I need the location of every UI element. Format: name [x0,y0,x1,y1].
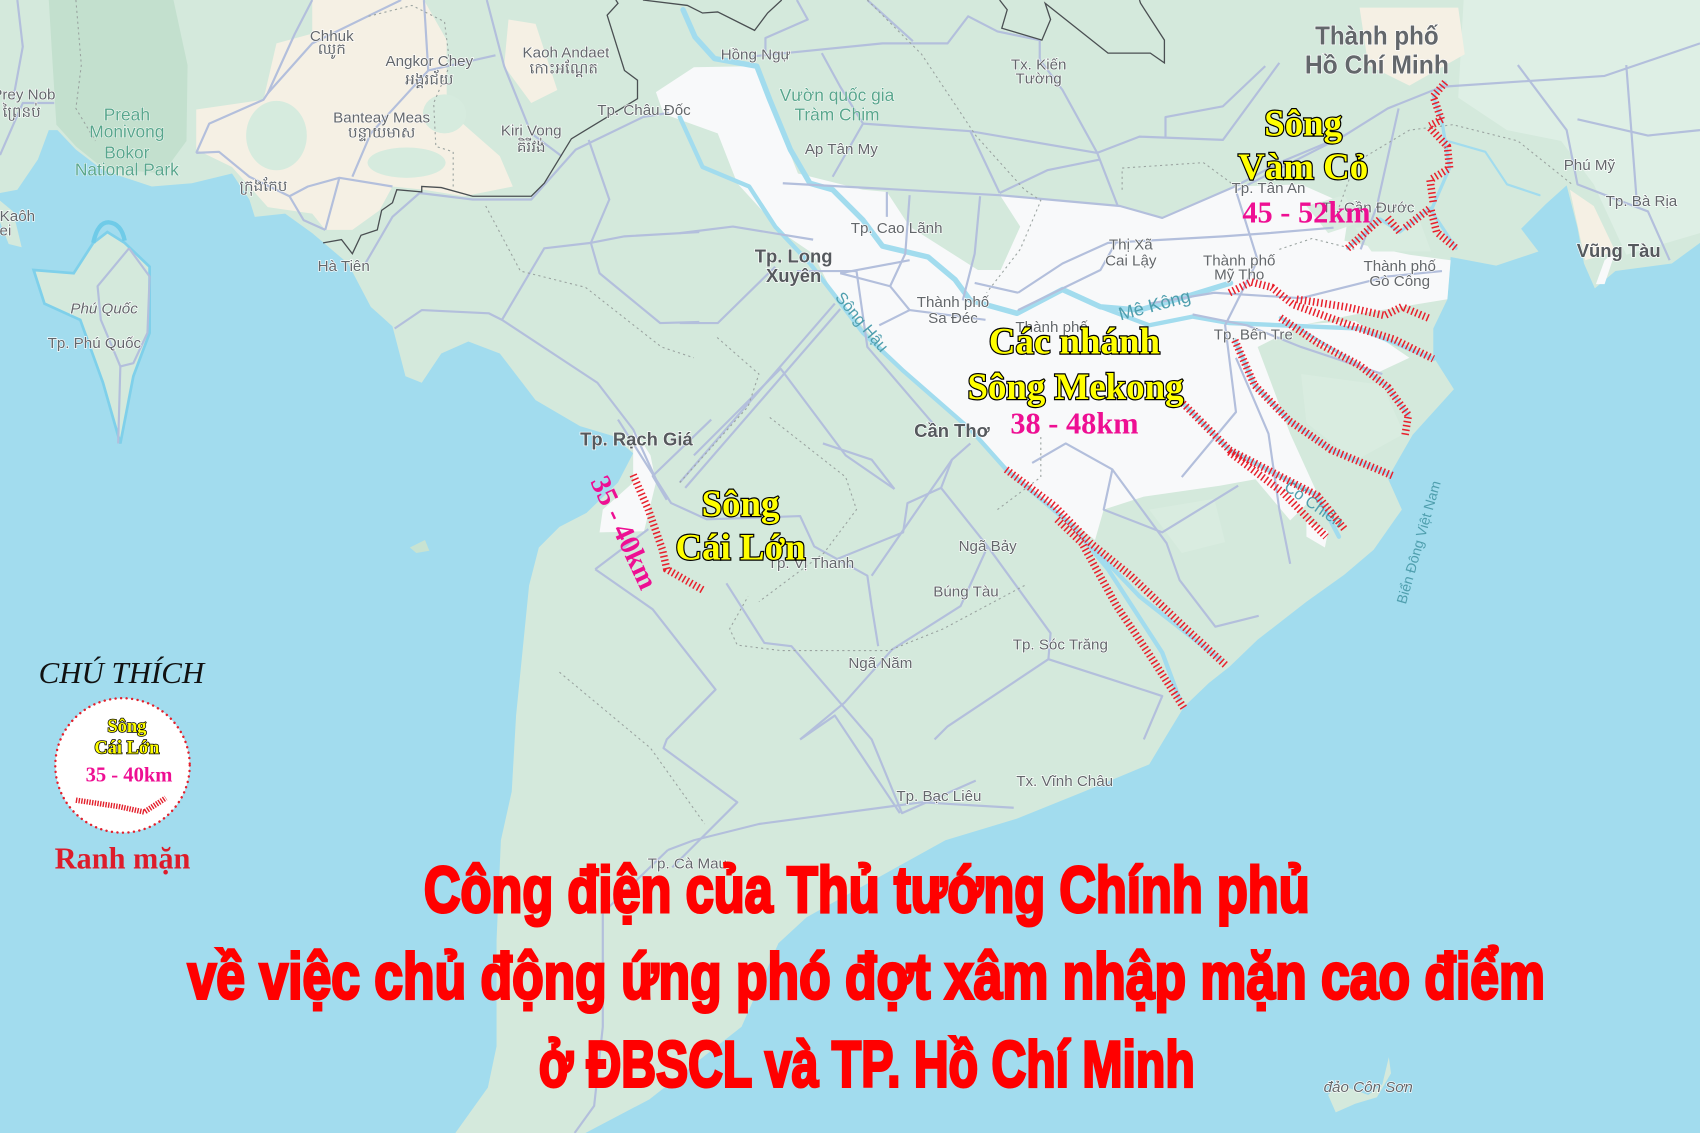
map place labels: Mỹ Tho [1214,267,1264,284]
map place labels: Tường [1016,70,1062,87]
label: Sông Cái Lớn: 35 - 40km [584,471,664,594]
map place labels: Tp. Long [755,245,833,266]
label: Các nhánh Sông Mekong: Sông Mekong [967,366,1184,407]
map place labels: Tp. Cao Lãnh [851,220,943,237]
map place labels: Ngã Năm [848,655,912,672]
legend sample label [86,716,172,787]
label: Sông Vàm Cỏ: 45 - 52km [1242,195,1371,229]
title: ở ĐBSCL và TP. Hồ Chí Minh [539,1027,1195,1100]
map place labels: Tp. Phú Quốc [48,335,142,352]
Cambodia beige areas [196,0,1615,260]
map place labels: Monivong [89,122,164,142]
map place labels: Phú Mỹ [1564,157,1616,174]
map place labels: Thành phố [1015,319,1088,336]
map place labels: Thị Xã [1109,236,1153,253]
Bokor park forest [49,0,188,173]
map place labels: Kiri Vong [501,123,562,140]
salinity line: Cái Lớn [633,475,703,590]
map place labels: Banteay Meas [333,110,430,127]
urban white delta areas [600,66,1615,548]
label: Các nhánh Sông Mekong: 38 - 48km [1010,407,1138,441]
legend sample label: Cái Lớn [94,738,159,758]
label: Các nhánh Sông Mekong [967,320,1184,441]
map place labels: Hồng Ngự [721,47,791,64]
label: Sông Cái Lớn: Sông [702,483,780,524]
map place labels: គិរីវង់ [517,137,546,156]
map place labels: ឈូក [318,41,346,59]
map place labels: Tp. Sóc Trăng [1013,636,1108,653]
title [188,853,1545,1100]
map place labels: Kaoh Andaet [523,44,610,61]
map place labels: Tp. Bà Rịa [1606,193,1678,210]
map place labels: Bokor [104,142,150,162]
label: Các nhánh Sông Mekong: Các nhánh [989,320,1160,361]
map place labels: Mê Kông [1116,285,1193,324]
map place labels: Sông Hậu [831,289,892,356]
map place labels: Búng Tàu [933,583,999,600]
legend caption: Ranh mặn [55,841,191,875]
map place labels: Angkor Chey [386,53,474,70]
map place labels: ក្រុងកែប [240,176,287,196]
map place labels: Thành phố [1315,20,1439,50]
map place labels: Tràm Chim [794,104,880,124]
green patches inside delta [1149,195,1431,553]
map place labels: Kaôh [0,208,35,225]
lighter land, north east [1458,0,1700,255]
salinity lines: Mekong branches [1006,282,1433,708]
map place labels: Hà Tiên [318,258,370,275]
international border [323,0,1164,254]
map place labels: Cai Lậy [1105,253,1157,270]
rivers [680,10,1540,699]
map place labels: đảo Côn Sơn [1324,1079,1413,1096]
label: Sông Cái Lớn [584,471,805,594]
legend [39,655,206,875]
label: Sông Vàm Cỏ: Sông [1264,103,1343,144]
legend sample line [76,798,166,812]
label: Sông Cái Lớn: Cái Lớn [675,526,805,567]
map place labels: Phú Quốc [70,300,138,317]
map place labels: បន្ទាយមាស [348,125,415,142]
map place labels: Tp. Tân An [1232,180,1305,197]
legend sample label: 35 - 40km [86,765,172,787]
map place labels: Tp. Bến Tre [1214,326,1293,343]
map place labels: Xuyên [766,265,821,286]
title: Công điện của Thủ tướng Chính phủ [424,853,1310,926]
map place labels: អង្គរជ័យ [405,70,453,89]
map place labels: Vườn quốc gia [780,85,895,105]
map place labels: Tp. Rạch Giá [580,429,693,450]
map place labels: Tx. Kiến [1011,56,1066,73]
map place labels: Tp. Vị Thanh [768,555,854,572]
map place labels: Tp. Cà Mau [648,855,727,872]
map place labels: Tp. Châu Đốc [597,102,691,119]
Cambodia green patches [246,94,466,178]
map place labels: National Park [75,160,179,180]
map place labels: Ap Tân My [805,141,878,158]
map place labels: Preah [104,104,150,124]
label: Sông Vàm Cỏ: Vàm Cỏ [1238,146,1368,187]
map place labels: Ngã Bảy [959,538,1017,555]
map place labels: Cổ Chiên [1281,478,1347,531]
map place labels: Tp. Bạc Liêu [896,788,981,805]
map place labels: Thành phố [917,294,990,311]
label: Sông Vàm Cỏ [1238,103,1371,229]
map place labels: Hồ Chí Minh [1305,50,1449,80]
dashed province borders [76,0,1572,824]
map place labels: Tt. Cần Đước [1322,200,1415,217]
salinity lines: Vàm Cỏ [1348,82,1456,248]
map place labels: Chhuk [310,28,354,45]
legend circle [55,698,190,833]
map place labels: Biển Đông Việt Nam [1393,479,1444,606]
map place labels: Cần Thơ [914,420,991,441]
map place labels: Thành phố [1203,253,1276,270]
map place labels: Vũng Tàu [1577,240,1661,261]
map place labels: កោះអណ្តែត [530,59,598,78]
legend sample label: Sông [107,716,147,736]
map place labels: Thành phố [1363,258,1436,275]
map place labels: Sa Đéc [928,310,978,327]
map place labels: Gò Công [1369,273,1430,290]
map place labels: ព្រៃនប់ [2,102,41,121]
legend heading: CHÚ THÍCH [39,655,206,690]
map place labels: Tx. Vĩnh Châu [1016,773,1113,790]
